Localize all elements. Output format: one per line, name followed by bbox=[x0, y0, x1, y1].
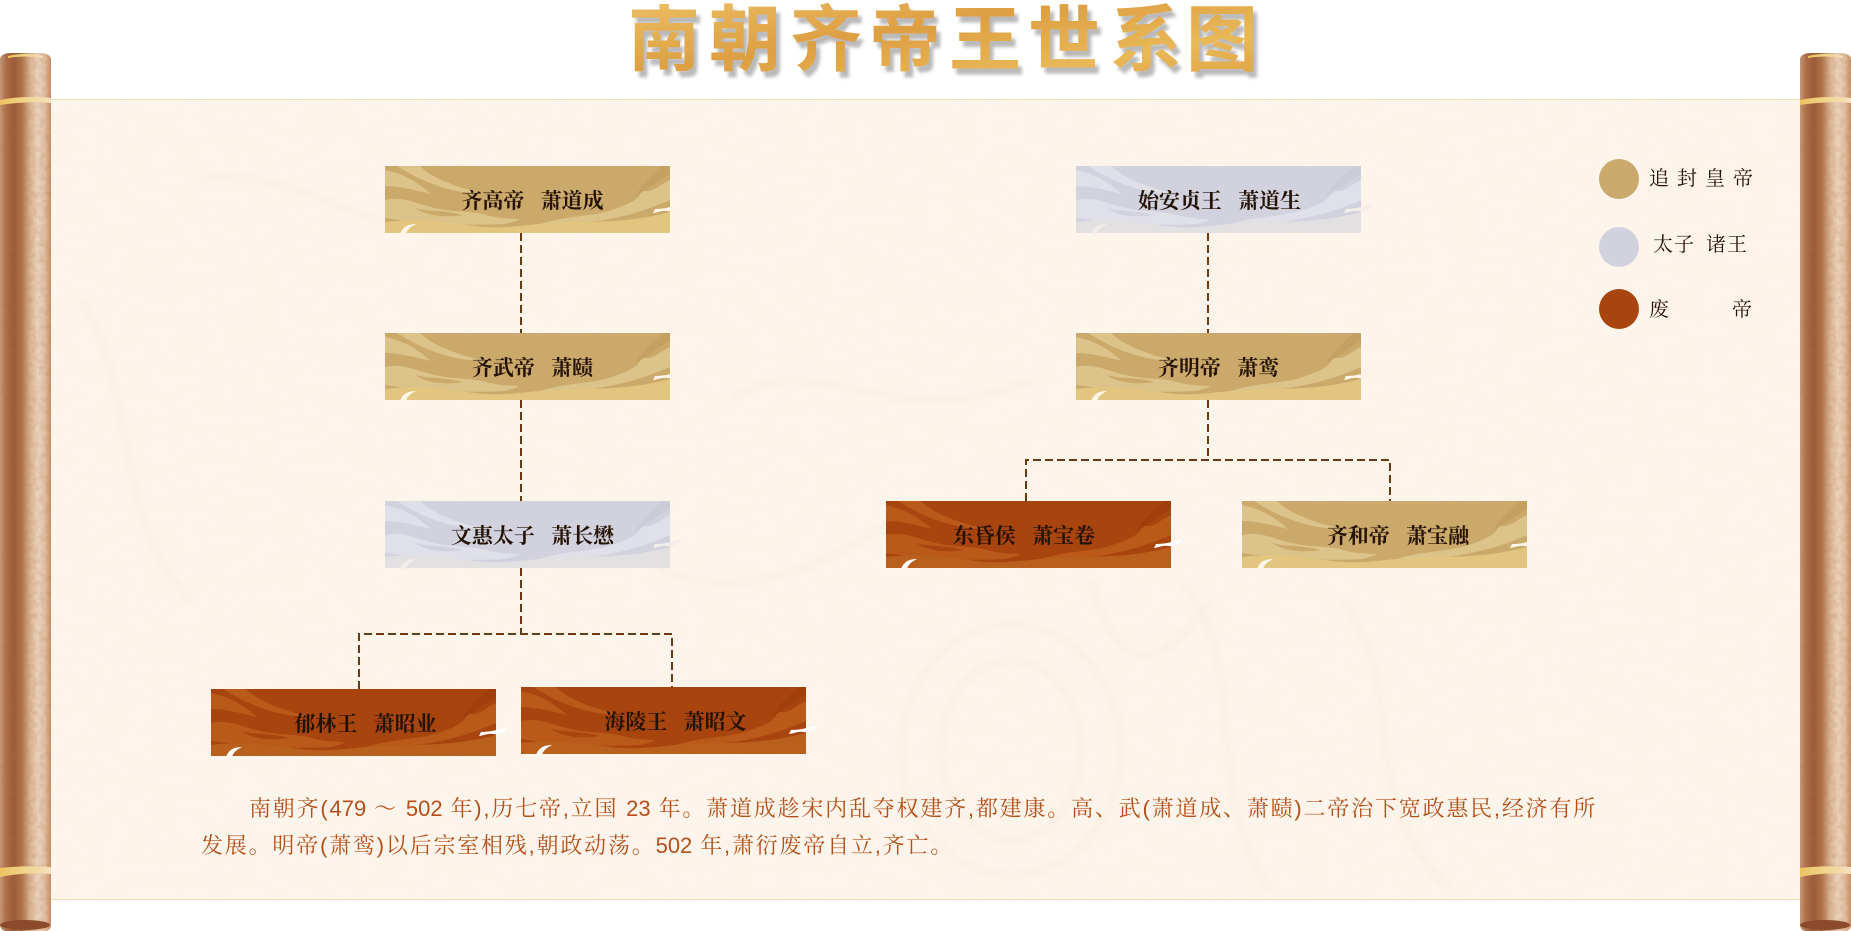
description line 2: 发展。明帝(萧鸾)以后宗室相残,朝政动荡。502 年,萧衍废帝自立,齐亡。 bbox=[201, 833, 954, 858]
node: 始安贞王 萧道生 bbox=[1076, 166, 1372, 234]
legend: 废帝: 废 bbox=[1649, 299, 1669, 321]
legend: 太子诸王: 太子 诸王 bbox=[1653, 234, 1748, 256]
node: 齐明帝 萧鸾: 齐明帝 萧鸾 bbox=[1158, 356, 1279, 380]
node: 海陵王 萧昭文: 海陵王 萧昭文 bbox=[604, 710, 747, 734]
node: 齐和帝 萧宝融: 齐和帝 萧宝融 bbox=[1327, 524, 1469, 548]
node: 齐武帝 萧赜 bbox=[385, 333, 670, 400]
icon: left scroll roller bbox=[0, 53, 51, 931]
icon: right scroll roller bbox=[1800, 53, 1851, 931]
node: 东昏侯 萧宝卷 bbox=[886, 501, 1183, 569]
node: 齐高帝 萧道成: 齐高帝 萧道成 bbox=[461, 189, 604, 213]
description line 1: 南朝齐(479 ～ 502 年),历七帝,立国 23 年。萧道成趁宋内乱夺权建齐,都建康。高、武(萧道成、萧赜)二帝治下宽政惠民,经济有所 bbox=[249, 796, 1597, 821]
node: 齐高帝 萧道成 bbox=[385, 166, 670, 233]
node: 海陵王 萧昭文 bbox=[521, 687, 818, 755]
node: 文惠太子 萧长懋 bbox=[385, 501, 682, 569]
legend: 废帝 bbox=[1599, 289, 1752, 329]
node: 郁林王 萧昭业 bbox=[211, 689, 508, 757]
node: 东昏侯 萧宝卷: 东昏侯 萧宝卷 bbox=[953, 524, 1095, 548]
legend bbox=[1599, 159, 1761, 329]
legend: 废帝: 帝 bbox=[1732, 299, 1752, 321]
node: 文惠太子 萧长懋: 文惠太子 萧长懋 bbox=[451, 524, 614, 548]
node: 始安贞王 萧道生: 始安贞王 萧道生 bbox=[1138, 189, 1301, 213]
legend: 追封皇帝 bbox=[1599, 159, 1761, 199]
legend: 追封皇帝: 追封皇帝 bbox=[1649, 168, 1761, 190]
node: 郁林王 萧昭业: 郁林王 萧昭业 bbox=[294, 712, 437, 736]
node: 齐和帝 萧宝融 bbox=[1242, 501, 1527, 568]
node: 齐明帝 萧鸾 bbox=[1076, 333, 1361, 400]
legend: 太子诸王 bbox=[1599, 227, 1748, 267]
description text bbox=[201, 796, 1597, 858]
node: 齐武帝 萧赜: 齐武帝 萧赜 bbox=[472, 356, 593, 380]
